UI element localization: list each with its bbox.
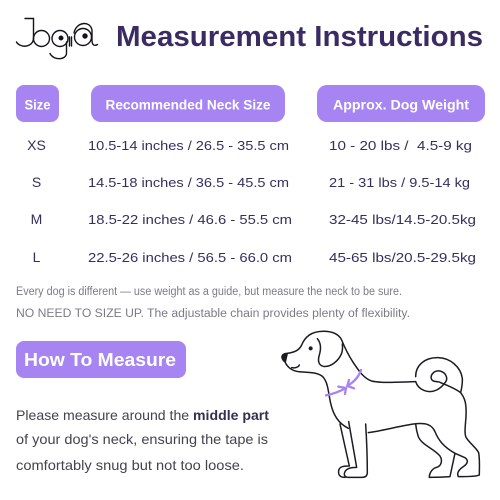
how to measure heading: How To Measure [24, 349, 176, 370]
size table rows: 10.5-14 inches / 26.5 - 35.5 cm [88, 138, 289, 153]
sizing note [16, 286, 410, 320]
sizing note: NO NEED TO SIZE UP. The adjustable chain provides plenty of flexibility. [16, 308, 410, 320]
size table rows: 21 - 31 lbs / 9.5-14 kg [329, 175, 470, 190]
size table rows: 45-65 lbs/20.5-29.5kg [329, 250, 476, 265]
neck size header [91, 85, 285, 122]
neck size header: Recommended Neck Size [106, 98, 271, 112]
size header: Size [24, 98, 51, 112]
size table rows: 10 - 20 lbs / 4.5-9 kg [329, 138, 472, 153]
measuring instructions: of your dog's neck, ensuring the tape is [16, 431, 268, 447]
size table rows: 22.5-26 inches / 56.5 - 66.0 cm [88, 250, 292, 265]
size table rows: 32-45 lbs/14.5-20.5kg [329, 212, 476, 227]
size table rows: L [33, 249, 41, 265]
measuring instructions [16, 407, 269, 473]
weight header [317, 85, 485, 122]
size table rows: M [31, 211, 42, 227]
size table rows: XS [27, 137, 46, 153]
icon: dog with neck measurement [282, 331, 479, 477]
how to measure heading [16, 341, 186, 378]
measuring instructions: Please measure around the middle part [16, 407, 269, 423]
size table rows [27, 137, 476, 265]
size header [16, 85, 59, 122]
size table rows: 18.5-22 inches / 46.6 - 55.5 cm [88, 212, 292, 227]
size table rows: S [32, 174, 41, 190]
measuring instructions: comfortably snug but not too loose. [16, 457, 244, 473]
size table rows: 14.5-18 inches / 36.5 - 45.5 cm [88, 175, 289, 190]
logo [16, 18, 98, 59]
weight header: Approx. Dog Weight [333, 98, 470, 112]
title: Measurement Instructions [116, 21, 483, 53]
sizing note: Every dog is different — use weight as a guide, but measure the neck to be sure. [16, 286, 402, 298]
